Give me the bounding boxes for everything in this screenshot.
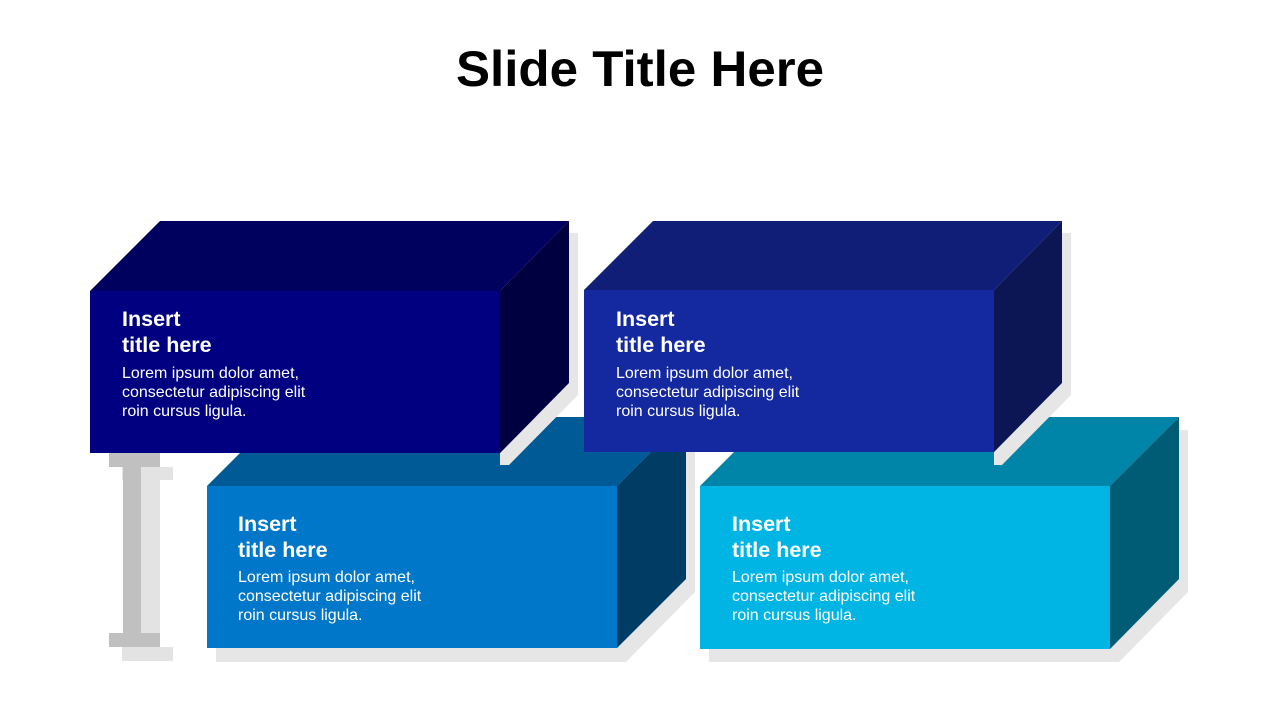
text: box 1 heading: title here: [122, 333, 212, 357]
text: box 4 heading: Insert: [732, 512, 791, 536]
text: box 1 body: Lorem ipsum dolor amet,: [122, 365, 299, 382]
text: box 3 body: Lorem ipsum dolor amet,: [238, 569, 415, 586]
text: box 2 body: consectetur adipiscing elit: [616, 384, 800, 401]
panel: box 4 bottom-right: [700, 417, 1188, 662]
text: box 2 body: Lorem ipsum dolor amet,: [616, 365, 793, 382]
text: box 2 heading: title here: [616, 333, 706, 357]
text: box 1 body: consectetur adipiscing elit: [122, 384, 306, 401]
panel: box 1 top-left: [90, 221, 578, 465]
panel: box 2 top-right: [584, 221, 1071, 465]
text: box 2 body: roin cursus ligula.: [616, 403, 740, 420]
text: box 3 heading: title here: [238, 538, 328, 562]
text: box 1 body: roin cursus ligula.: [122, 403, 246, 420]
text: box 3 body: roin cursus ligula.: [238, 607, 362, 624]
text: box 3 body: consectetur adipiscing elit: [238, 588, 422, 605]
text: box 1 heading: Insert: [122, 307, 181, 331]
icon: gray I-beam connector: [109, 453, 173, 661]
text: box 4 body: consectetur adipiscing elit: [732, 588, 916, 605]
text: box 4 body: Lorem ipsum dolor amet,: [732, 569, 909, 586]
panel: box 3 bottom-left: [207, 417, 695, 662]
text: box 3 heading: Insert: [238, 512, 297, 536]
title: Slide Title Here: [456, 41, 824, 97]
text: box 4 body: roin cursus ligula.: [732, 607, 856, 624]
text: box 2 heading: Insert: [616, 307, 675, 331]
text: box 4 heading: title here: [732, 538, 822, 562]
